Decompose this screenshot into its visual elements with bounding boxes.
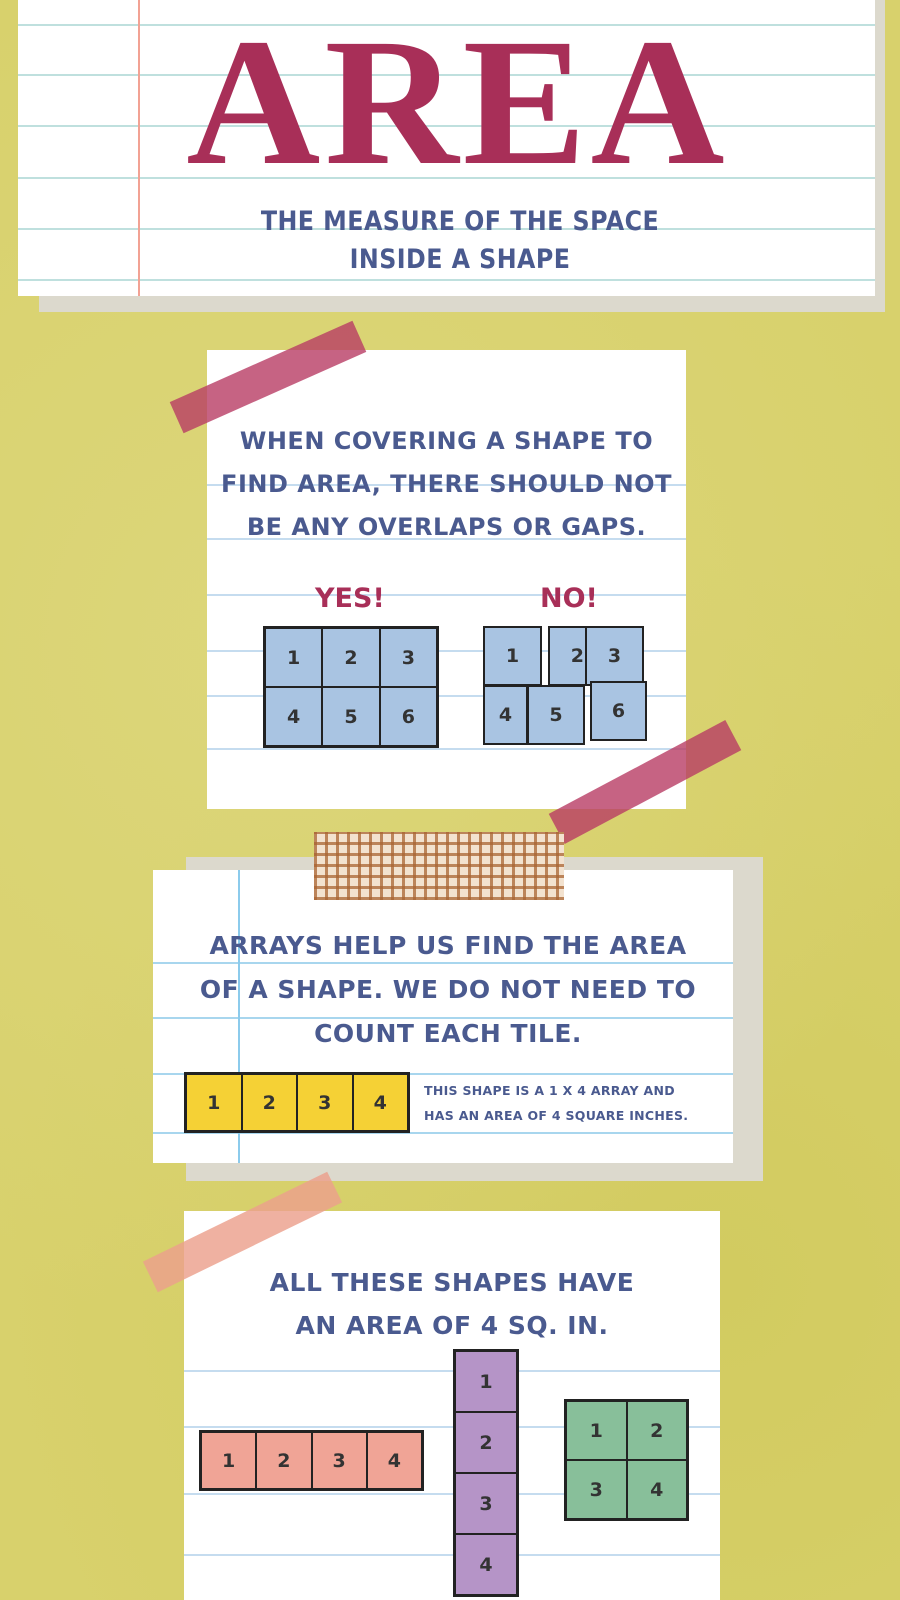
yes grid: 3 bbox=[402, 646, 415, 668]
tape: plaid bbox=[314, 832, 564, 900]
no grid: 5 bbox=[549, 704, 563, 726]
salmon 1x4: 1 bbox=[222, 1450, 235, 1472]
no grid: 1 bbox=[506, 645, 519, 667]
green 2x2: 2 bbox=[650, 1420, 663, 1442]
array caption: HAS AN AREA OF 4 SQUARE INCHES. bbox=[424, 1108, 688, 1123]
heading: ALL THESE SHAPES HAVE bbox=[270, 1268, 634, 1297]
label: no: NO! bbox=[540, 583, 598, 614]
salmon 1x4: 4 bbox=[388, 1450, 401, 1472]
no grid bbox=[483, 626, 647, 745]
no grid: 4 bbox=[499, 704, 512, 726]
yellow 1x4 array: 3 bbox=[318, 1092, 331, 1114]
subtitle: INSIDE A SHAPE bbox=[350, 244, 570, 275]
tape: pink top bbox=[170, 321, 366, 433]
purple 4x1: 1 bbox=[479, 1370, 493, 1392]
purple 4x1: 4 bbox=[479, 1554, 493, 1576]
yes grid: 1 bbox=[287, 646, 300, 668]
yellow 1x4 array bbox=[184, 1072, 410, 1133]
yes grid bbox=[263, 626, 439, 748]
green 2x2: 1 bbox=[590, 1420, 603, 1442]
no grid: 2 bbox=[571, 645, 584, 667]
salmon 1x4 bbox=[199, 1430, 424, 1491]
label: yes: YES! bbox=[315, 583, 385, 614]
subtitle: THE MEASURE OF THE SPACE bbox=[261, 206, 659, 237]
yes grid: 2 bbox=[344, 646, 358, 668]
panel: title header bbox=[18, 0, 885, 312]
salmon 1x4: 2 bbox=[277, 1450, 290, 1472]
array caption: THIS SHAPE IS A 1 X 4 ARRAY AND bbox=[424, 1083, 675, 1098]
rule text: BE ANY OVERLAPS OR GAPS. bbox=[247, 513, 646, 541]
no grid: 3 bbox=[608, 645, 621, 667]
tape: pink middle bbox=[549, 720, 741, 844]
arrays text: ARRAYS HELP US FIND THE AREA bbox=[209, 931, 687, 960]
array caption bbox=[424, 1083, 688, 1123]
rule text: WHEN COVERING A SHAPE TO bbox=[240, 427, 653, 455]
panel: arrays bbox=[153, 857, 763, 1181]
purple 4x1 bbox=[453, 1349, 519, 1597]
yellow 1x4 array: 2 bbox=[263, 1092, 276, 1114]
no grid: 6 bbox=[612, 700, 625, 722]
panel: same area shapes bbox=[184, 1211, 720, 1600]
yellow 1x4 array: 4 bbox=[374, 1092, 387, 1114]
purple 4x1: 2 bbox=[479, 1432, 493, 1454]
rule text bbox=[221, 427, 672, 541]
green 2x2: 3 bbox=[590, 1478, 603, 1500]
yellow 1x4 array: 1 bbox=[207, 1092, 220, 1114]
tape: peach bbox=[143, 1172, 342, 1292]
purple 4x1: 3 bbox=[479, 1492, 493, 1514]
panel: overlaps and gaps bbox=[207, 350, 686, 809]
arrays text: COUNT EACH TILE. bbox=[314, 1019, 582, 1048]
subtitle bbox=[261, 206, 659, 275]
yes grid: 5 bbox=[344, 706, 358, 728]
heading: AN AREA OF 4 SQ. IN. bbox=[295, 1311, 608, 1340]
green 2x2 bbox=[564, 1399, 689, 1521]
yes grid: 4 bbox=[287, 706, 300, 728]
title: AREA bbox=[186, 2, 729, 203]
arrays text bbox=[200, 931, 696, 1048]
green 2x2: 4 bbox=[650, 1478, 663, 1500]
rule text: FIND AREA, THERE SHOULD NOT bbox=[221, 470, 672, 498]
heading bbox=[270, 1268, 634, 1340]
arrays text: OF A SHAPE. WE DO NOT NEED TO bbox=[200, 975, 696, 1004]
salmon 1x4: 3 bbox=[332, 1450, 346, 1472]
yes grid: 6 bbox=[402, 706, 415, 728]
